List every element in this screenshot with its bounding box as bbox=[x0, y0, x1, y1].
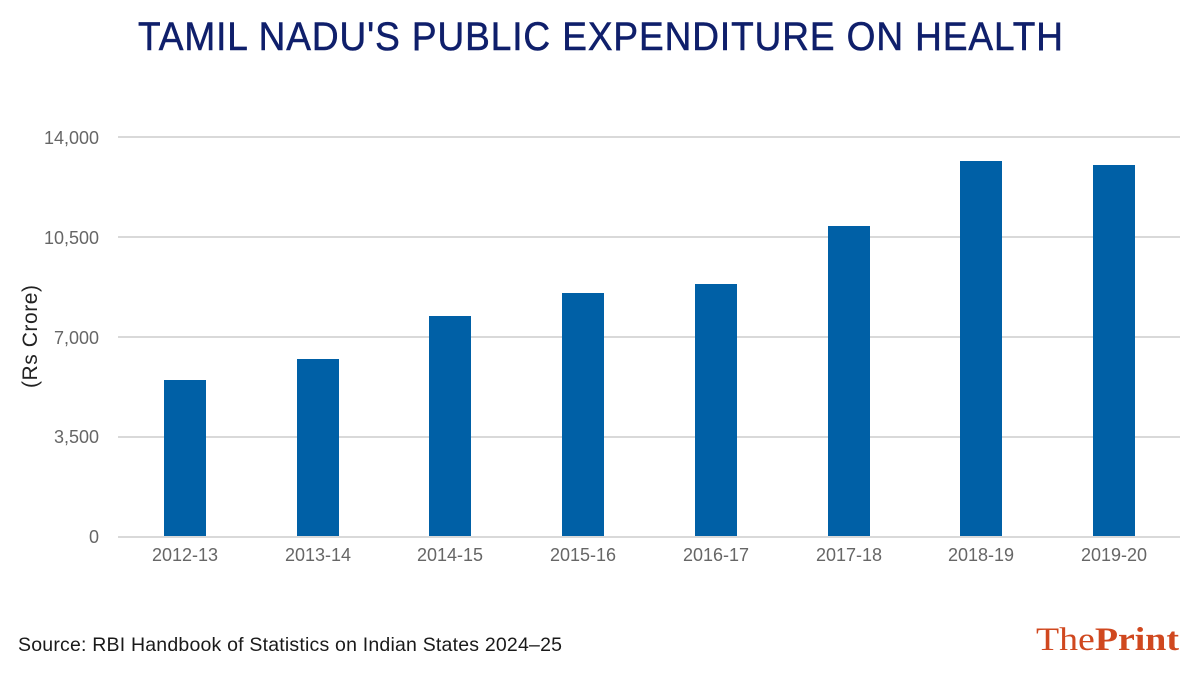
x axis labels bbox=[152, 545, 1147, 565]
title: TAMIL NADU'S PUBLIC EXPENDITURE ON HEALTH bbox=[138, 15, 1063, 59]
x axis labels: 2017-18 bbox=[816, 545, 882, 565]
x axis labels: 2014-15 bbox=[417, 545, 483, 565]
x axis labels: 2016-17 bbox=[683, 545, 749, 565]
y axis title: (Rs Crore) bbox=[19, 285, 42, 388]
y axis labels: 14,000 bbox=[44, 128, 99, 148]
y axis labels: 3,500 bbox=[54, 427, 99, 447]
y axis labels: 10,500 bbox=[44, 228, 99, 248]
x axis labels: 2013-14 bbox=[285, 545, 351, 565]
y axis labels bbox=[44, 128, 99, 547]
logo: ThePrint: ThePrint bbox=[1036, 622, 1179, 658]
x axis labels: 2019-20 bbox=[1081, 545, 1147, 565]
x axis labels: 2018-19 bbox=[948, 545, 1014, 565]
source note: Source: RBI Handbook of Statistics on Indian States 2024–25 bbox=[18, 634, 562, 656]
y axis labels: 7,000 bbox=[54, 328, 99, 348]
x axis labels: 2015-16 bbox=[550, 545, 616, 565]
x axis labels: 2012-13 bbox=[152, 545, 218, 565]
y axis labels: 0 bbox=[89, 527, 99, 547]
bar chart bbox=[19, 128, 1180, 565]
bars bbox=[164, 161, 1135, 536]
